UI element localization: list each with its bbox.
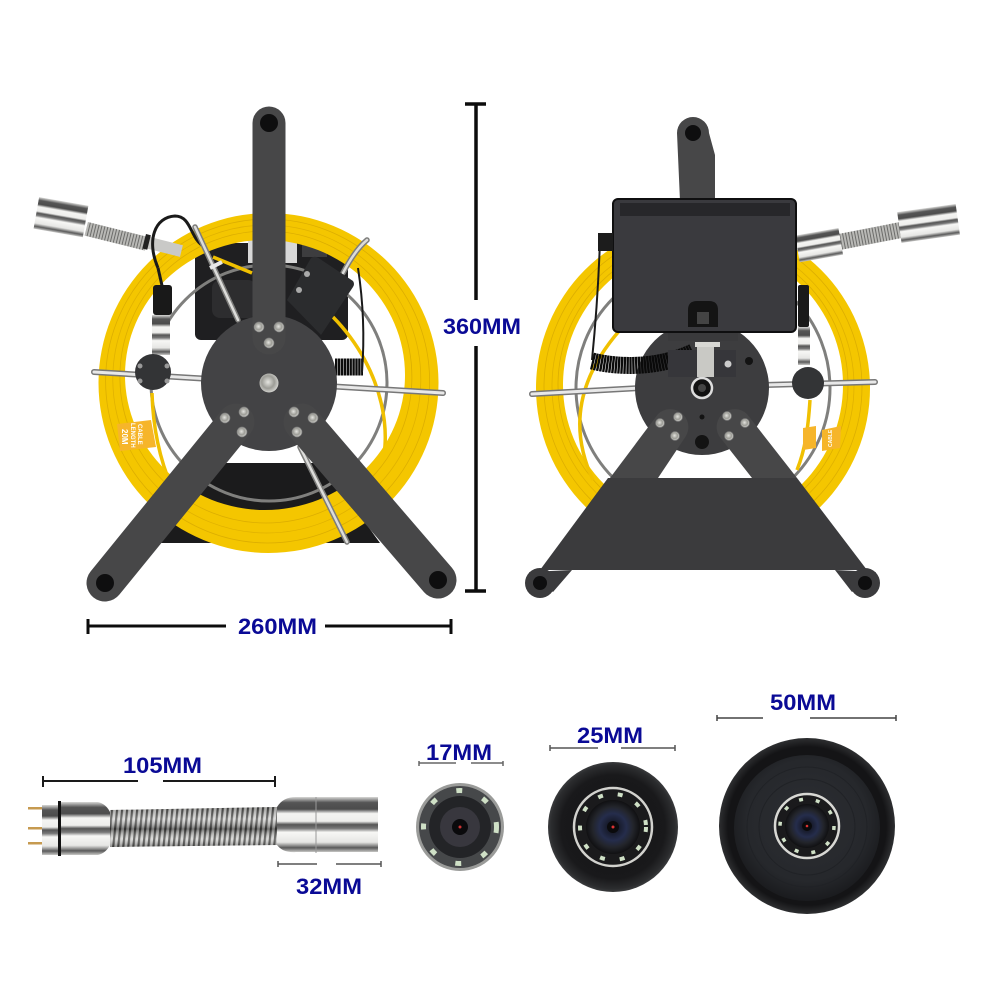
dimension: 50MM diameter: 50MM bbox=[770, 690, 836, 715]
camera on cable bbox=[34, 197, 183, 257]
left reel: front view bbox=[34, 114, 447, 592]
arm bolts bbox=[220, 322, 318, 437]
25mm camera ball bbox=[548, 762, 678, 892]
cable tie bbox=[210, 262, 222, 268]
camera on cable bbox=[795, 204, 960, 262]
round junction puck bbox=[792, 367, 824, 399]
hub centre bolt bbox=[260, 374, 278, 392]
dimension: 25MM diameter: 25MM bbox=[577, 723, 643, 748]
monitor back bbox=[195, 240, 348, 340]
brace bolts bbox=[656, 412, 750, 440]
dimension: 17MM diameter: 17MM bbox=[426, 740, 492, 765]
lower left arm bbox=[105, 422, 236, 583]
top arm bbox=[252, 123, 286, 338]
black seal bbox=[58, 801, 61, 856]
dimension: 105MM probe length bbox=[43, 753, 275, 787]
dimension: 260MM width bbox=[88, 614, 451, 639]
black connector bbox=[153, 285, 172, 315]
dimension: 50MM diameter bbox=[717, 690, 896, 721]
50mm camera ball bbox=[719, 738, 895, 914]
spring neck bbox=[110, 807, 277, 847]
steel cross bar bbox=[532, 382, 875, 394]
right reel: back view bbox=[525, 117, 960, 598]
thin cable bbox=[358, 268, 363, 372]
lower left brace bbox=[610, 409, 688, 478]
camera probe bbox=[28, 797, 378, 856]
base foot left bbox=[525, 568, 572, 598]
yellow cable coil bbox=[98, 213, 438, 553]
camera head bbox=[277, 797, 378, 852]
connector on right bbox=[798, 285, 810, 365]
threaded base bbox=[42, 805, 59, 855]
dimension: 360MM height bbox=[443, 104, 521, 591]
hub hole ring bbox=[692, 378, 712, 398]
thin cable bbox=[592, 240, 600, 360]
round junction puck bbox=[135, 354, 171, 390]
reel base shadow plate bbox=[160, 463, 380, 543]
rear collar bbox=[61, 802, 110, 855]
handle arm bbox=[677, 117, 715, 201]
dimension: 32MM head length: 32MM bbox=[296, 874, 362, 899]
17mm camera lens bbox=[416, 783, 504, 871]
silver connector bbox=[152, 315, 170, 355]
steel cross bar bbox=[94, 372, 443, 393]
steel hoops bbox=[195, 227, 367, 542]
rubber feet bbox=[96, 114, 447, 592]
cable length tag: CABLE bbox=[828, 429, 834, 447]
cable length tag: LENGTH bbox=[129, 423, 135, 448]
yellow cable coil bbox=[536, 221, 870, 555]
power jack bbox=[598, 233, 613, 251]
handle knob bbox=[685, 125, 701, 141]
lower right brace bbox=[717, 409, 797, 478]
coiled cable bbox=[335, 358, 363, 376]
bracket bbox=[668, 333, 738, 377]
yellow inner cable bbox=[152, 257, 385, 488]
cable length tag: 20M bbox=[120, 429, 129, 445]
hub disc bbox=[201, 315, 337, 451]
base foot right bbox=[835, 568, 880, 598]
coiled cable bbox=[592, 352, 693, 365]
control box bbox=[287, 257, 354, 335]
dimension: 105MM probe length: 105MM bbox=[123, 753, 202, 778]
monitor bbox=[613, 199, 796, 332]
dimension: 25MM diameter bbox=[550, 723, 675, 751]
head seam bbox=[315, 797, 317, 853]
hub disc bbox=[635, 321, 769, 455]
dimension: 32MM head length bbox=[278, 861, 381, 899]
dimension: 17MM diameter bbox=[419, 740, 503, 766]
yellow inner cable bbox=[580, 330, 810, 480]
steel ring bbox=[576, 261, 830, 515]
dimension: 360MM height: 360MM bbox=[443, 314, 521, 339]
dimension: 260MM width: 260MM bbox=[238, 614, 317, 639]
steel ring bbox=[151, 265, 387, 501]
cable length tag bbox=[803, 426, 841, 451]
hub holes bbox=[695, 357, 753, 449]
cable length tag bbox=[117, 420, 156, 451]
cable length tag: CABLE bbox=[136, 424, 142, 445]
base plate bbox=[540, 478, 867, 570]
contact pins bbox=[28, 807, 42, 844]
black connector cable bbox=[153, 216, 205, 268]
lower right arm bbox=[302, 422, 438, 580]
